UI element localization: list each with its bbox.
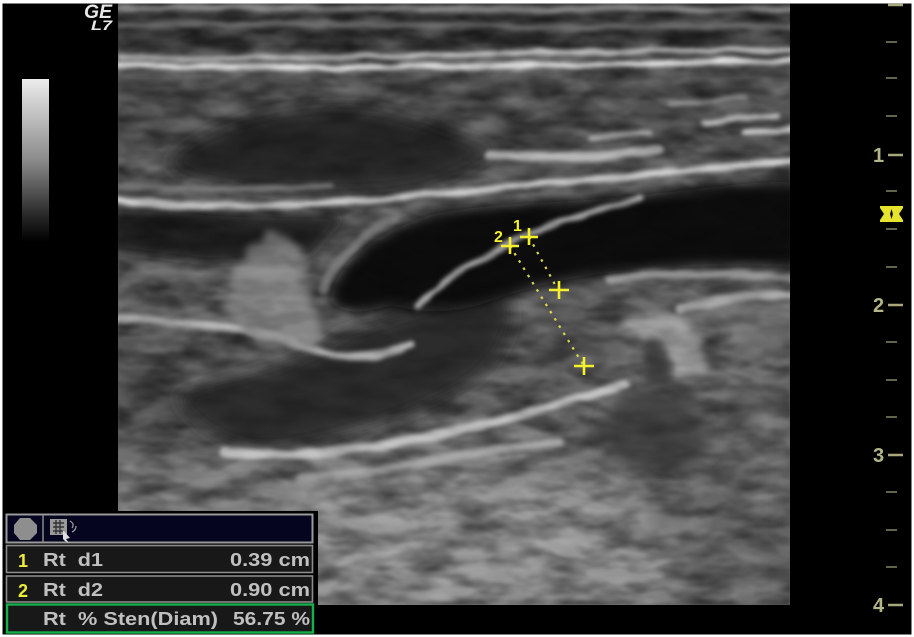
upper dark muscle band xyxy=(165,107,500,192)
upper vessel wall xyxy=(112,160,800,206)
tissue speckle xyxy=(118,3,790,605)
row d2: 0.90 cm xyxy=(230,579,310,600)
plaque echo xyxy=(225,235,319,350)
row d1 xyxy=(6,546,312,572)
acoustic shadow xyxy=(604,388,712,471)
ultrasound image sector xyxy=(108,0,808,615)
depth ticks xyxy=(886,5,903,605)
row d1: Rt d1 xyxy=(43,549,103,570)
row stenosis highlighted: 56.75 % xyxy=(233,608,310,629)
tissue tone layers xyxy=(108,0,808,615)
measurement panel xyxy=(0,511,318,637)
dotted caliper line d1 xyxy=(529,237,558,290)
carotid bulb lumen (hazy) xyxy=(175,290,511,449)
row stenosis highlighted: Rt % Sten(Diam) xyxy=(43,608,218,629)
probe label: L7 xyxy=(91,17,114,33)
row d1: 0.39 cm xyxy=(230,549,310,570)
dark vessel lumen xyxy=(330,182,800,312)
dotted caliper line d2 xyxy=(510,246,584,366)
row d1: 1 xyxy=(18,551,28,571)
grayscale bar xyxy=(22,79,49,242)
icon: cursor grid xyxy=(50,519,76,543)
row d2: Rt d2 xyxy=(43,579,103,600)
caliper crosses xyxy=(501,228,594,375)
caliper labels: 1 xyxy=(513,218,522,235)
focus marker xyxy=(880,206,903,222)
calcified nodule xyxy=(620,316,704,378)
depth numbers: 1 xyxy=(873,145,884,167)
bifurcation flap xyxy=(322,218,395,290)
probe label xyxy=(84,2,114,33)
caliper labels: 2 xyxy=(494,229,503,246)
left dark vessel segment xyxy=(110,207,345,262)
measurement calipers xyxy=(494,218,594,375)
row d2: 2 xyxy=(18,581,28,601)
depth scale xyxy=(873,5,903,617)
probe label: GE xyxy=(84,2,113,23)
caliper labels xyxy=(494,218,522,246)
toolbar xyxy=(6,514,312,543)
icon: stop button xyxy=(14,518,37,540)
row stenosis highlighted xyxy=(7,604,313,632)
depth numbers: 4 xyxy=(873,595,885,617)
depth numbers: 2 xyxy=(873,295,884,317)
depth numbers: 3 xyxy=(873,445,884,467)
soft speckle over structures xyxy=(118,3,790,605)
bright tissue interfaces xyxy=(112,8,800,478)
lower wall xyxy=(112,318,410,356)
row d2 xyxy=(6,576,312,602)
depth numbers xyxy=(873,145,885,617)
